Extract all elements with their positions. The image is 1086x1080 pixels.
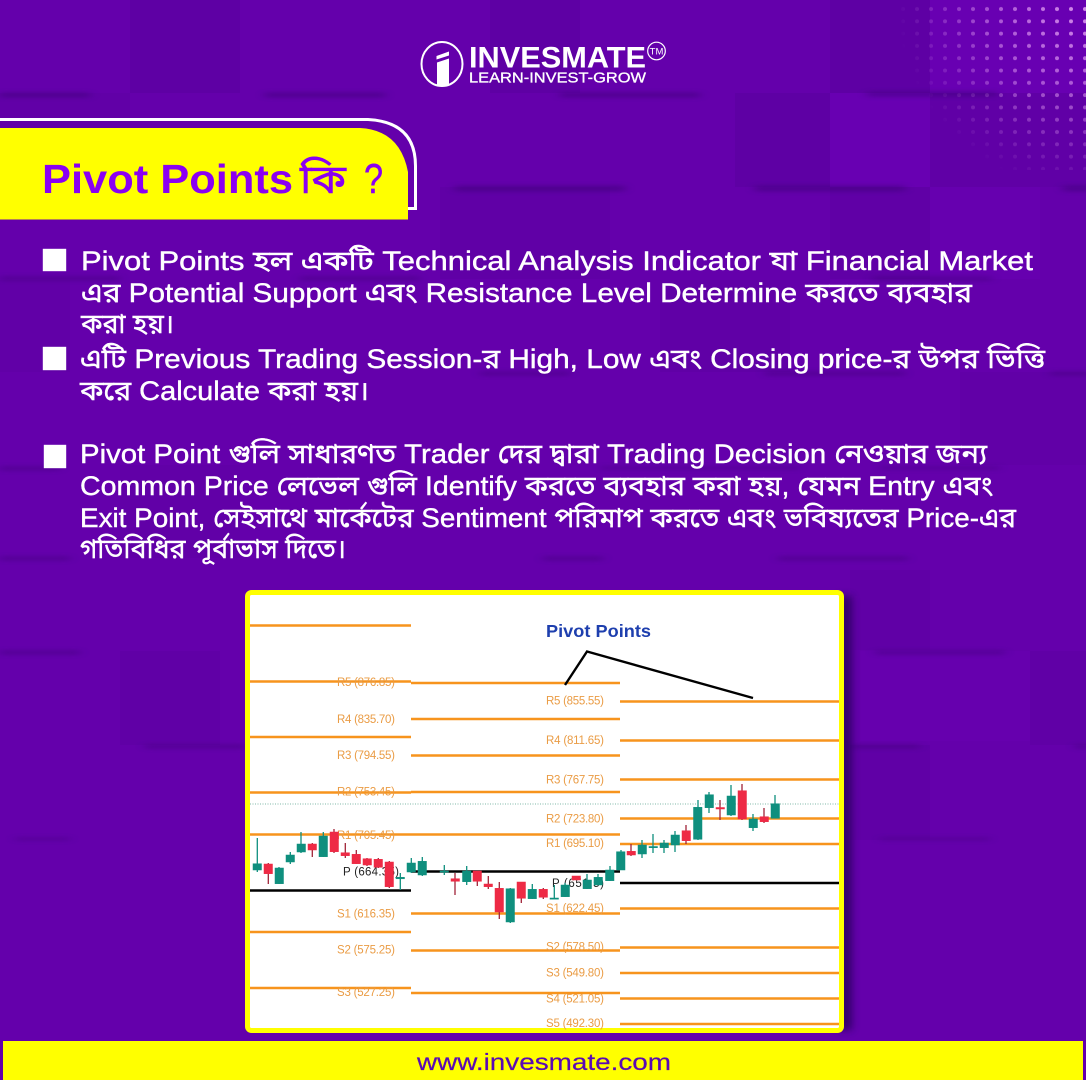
banner outline (0, 120, 416, 208)
title (42, 155, 383, 202)
bullet 3: Exit Point, সেইসাথে মার্কেটের Sentiment পরিমাপ করতে এবং ভবিষ্যতের Price-এর (80, 501, 1017, 533)
logo mark: letter i (436, 52, 449, 86)
bullet 2 (43, 343, 1046, 406)
bullet 1 (43, 245, 1034, 339)
callout arrow lines (565, 652, 753, 698)
chart panel (248, 592, 842, 1030)
level labels: R3 (767.75) (546, 774, 604, 786)
pivot level lines (250, 626, 839, 1024)
chart panel shadow (838, 596, 852, 1030)
bullet text block (43, 245, 1046, 565)
level labels: R5 (855.55) (546, 696, 604, 708)
bullet 3: গতিবিধির পূর্বাভাস দিতে। (80, 532, 346, 565)
logo (422, 42, 665, 86)
level labels: P (651.5) (552, 878, 604, 890)
level labels: R1 (705.45) (337, 830, 395, 842)
bullet 1: Pivot Points হল একটি Technical Analysis Indicator যা Financial Market (81, 245, 1034, 276)
level labels (337, 677, 604, 1030)
level labels: R3 (794.55) (337, 750, 395, 762)
bullet 3 (44, 438, 1017, 565)
level labels: R2 (723.80) (546, 814, 604, 826)
level labels: P (664.35) (343, 866, 399, 878)
level labels: S1 (616.35) (337, 908, 395, 920)
banner fill (0, 128, 408, 220)
title banner (0, 120, 416, 220)
bullet 3: Pivot Point গুলি সাধারণত Trader দের দ্বারা Trading Decision নেওয়ার জন্য (80, 438, 988, 469)
level labels: R4 (811.65) (546, 735, 604, 747)
background dot pattern (915, 6, 1086, 170)
title: ? (364, 155, 383, 202)
level labels: S2 (578.50) (546, 942, 604, 954)
title: কি (299, 157, 347, 202)
dotted current price line (250, 803, 839, 805)
level labels: S3 (527.25) (337, 987, 395, 999)
level labels: S5 (492.30) (546, 1018, 604, 1030)
level labels: S3 (549.80) (546, 968, 604, 980)
website url: www.invesmate.com (416, 1049, 671, 1075)
logo: TM (650, 46, 663, 58)
chart heading: Pivot Points (546, 621, 651, 641)
bullet 1: এর Potential Support এবং Resistance Level Determine করতে ব্যবহার (81, 278, 973, 308)
green candles (253, 785, 780, 923)
level labels: R2 (753.45) (337, 786, 395, 798)
level labels: R4 (835.70) (337, 714, 395, 726)
level labels: S2 (575.25) (337, 944, 395, 956)
background soft shadows (0, 92, 1086, 840)
logo: INVESMATE (469, 42, 646, 74)
bullet 2: এটি Previous Trading Session-র High, Low এবং Closing price-র উপর ভিত্তি (80, 343, 1046, 374)
bullet 1: করা হয়। (80, 309, 174, 339)
bullet 2: করে Calculate করা হয়। (79, 376, 369, 406)
level labels: S1 (622.45) (546, 903, 604, 915)
bullet 3: Common Price লেভেল গুলি Identify করতে ব্যবহার করা হয়, যেমন Entry এবং (80, 470, 993, 501)
footer bar (3, 1041, 1083, 1080)
level labels: R1 (695.10) (546, 838, 604, 850)
red candles (264, 784, 768, 919)
level labels: S4 (521.05) (546, 994, 604, 1006)
logo: LEARN-INVEST-GROW (469, 70, 646, 86)
title: Pivot Points (42, 156, 293, 202)
level labels: R5 (876.85) (337, 677, 395, 689)
